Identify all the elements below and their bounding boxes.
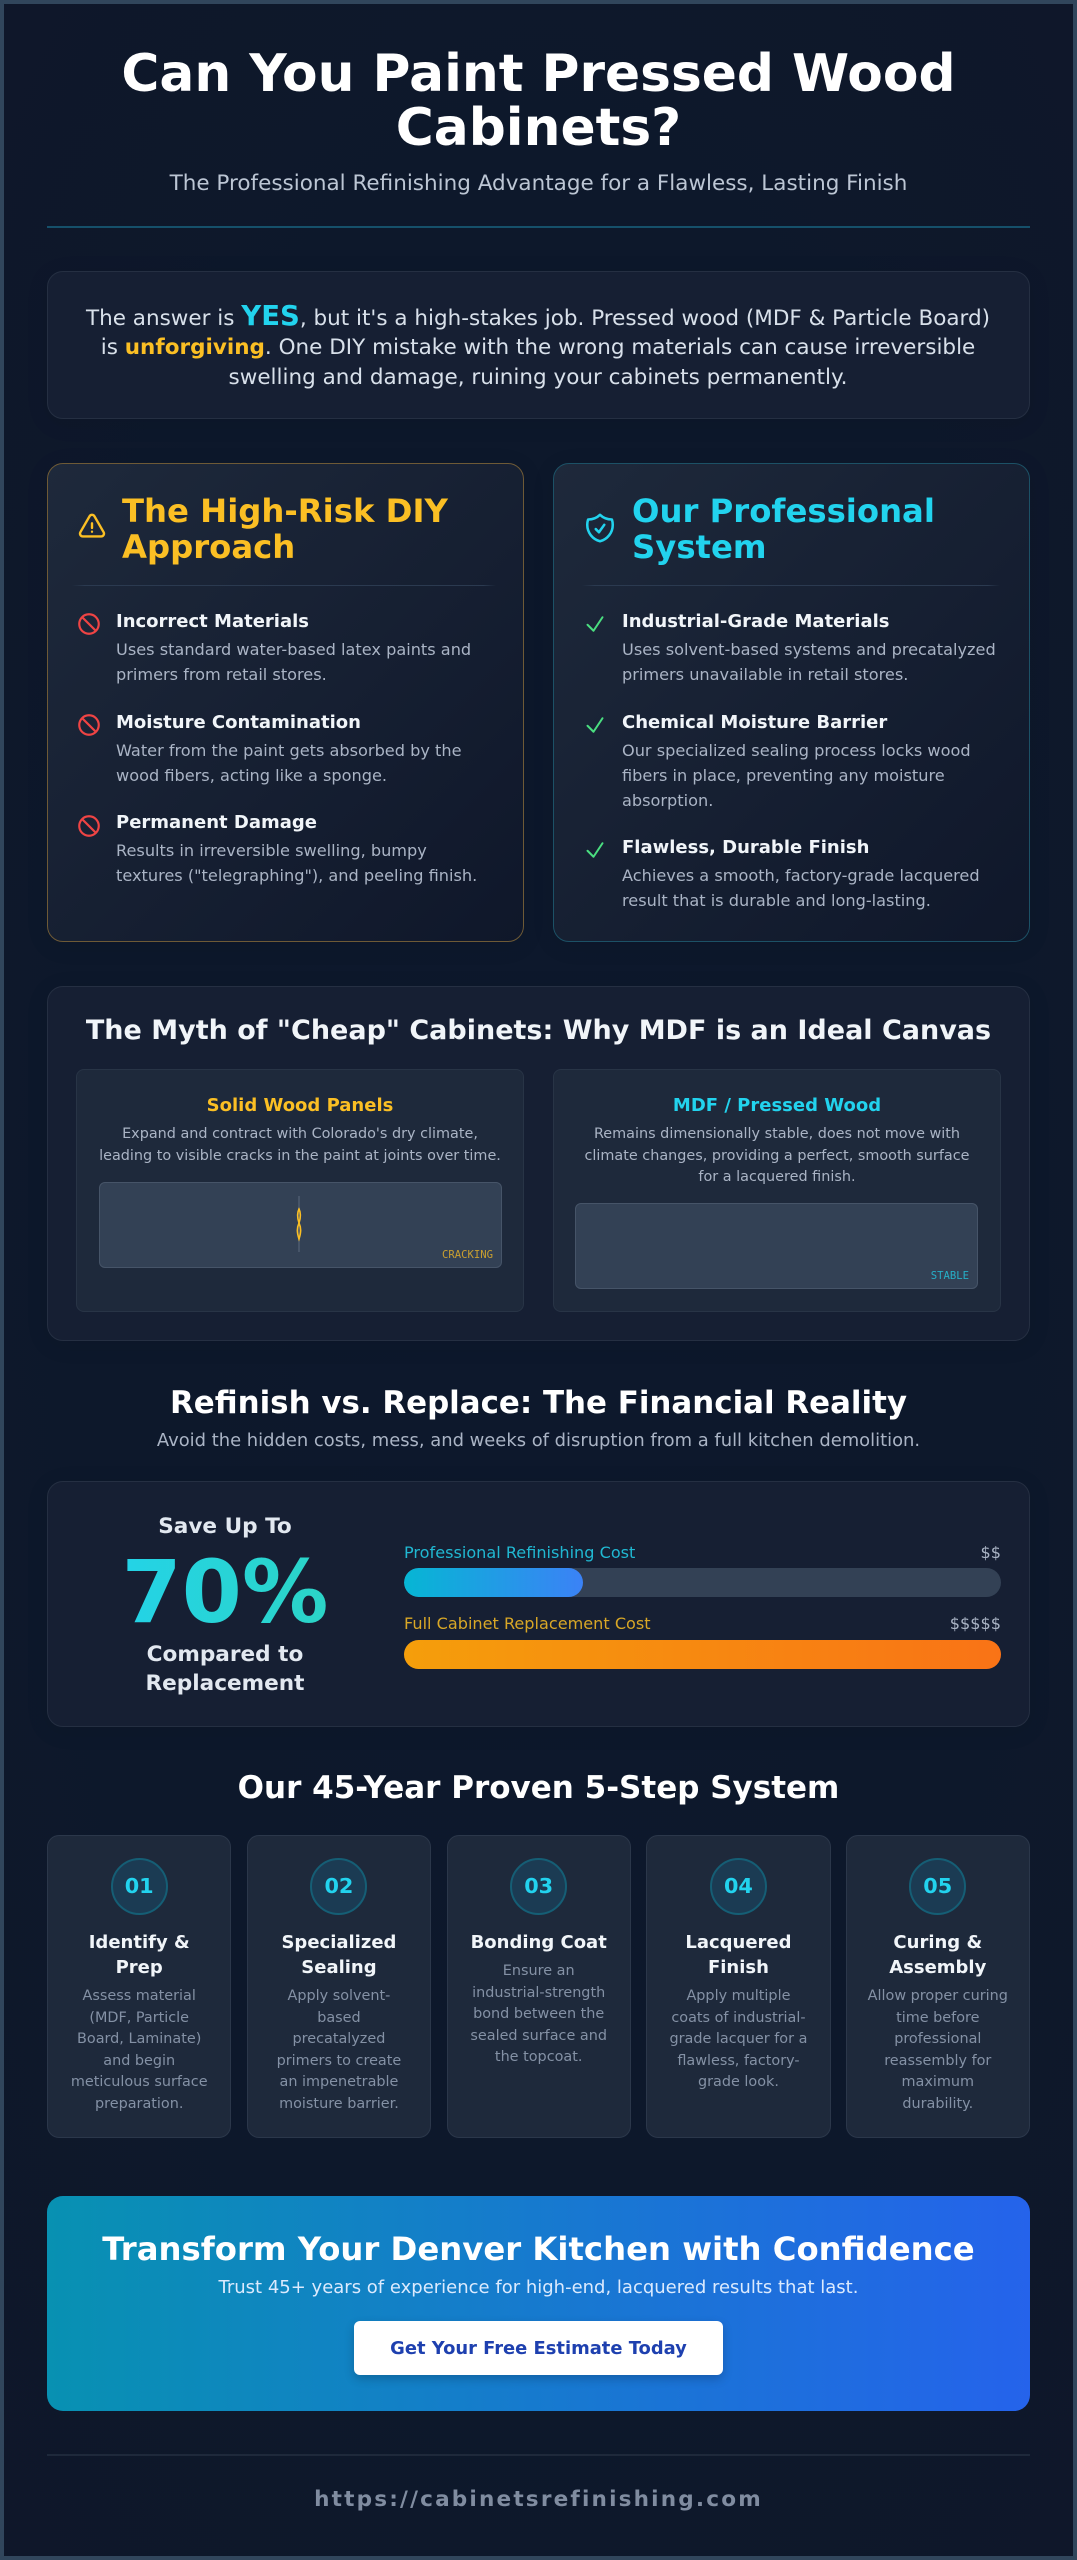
answer text (86, 300, 990, 390)
item: flawless durable finish: Achieves a smooth, factory-grade lacquered (622, 866, 980, 885)
step number (909, 1858, 966, 1915)
heading: myth: The Myth of "Cheap" Cabinets: Why MDF is an Ideal Canvas (86, 1015, 991, 1046)
item: chemical moisture barrier: absorption. (622, 791, 713, 810)
bar: refinishing (404, 1568, 1001, 1597)
save up to: Save Up To (158, 1514, 292, 1539)
step text: and begin (103, 2052, 175, 2068)
MDF sample (575, 1203, 978, 1289)
step title (685, 1932, 792, 1978)
compared to replacement (146, 1642, 304, 1696)
icon: check 1 (586, 616, 604, 632)
item: industrial-grade materials: primers unavailable in retail stores. (622, 665, 908, 684)
title: Cabinets? (396, 98, 681, 158)
step text: grade lacquer for a (669, 2031, 807, 2047)
step text: reassembly for (884, 2052, 991, 2068)
answer text: The answer is YES, but it's a high-stakes job. Pressed wood (MDF & Particle Board) (86, 300, 990, 332)
item: moisture contamination (116, 712, 462, 785)
MDF text: Remains dimensionally stable, does not move with (594, 1126, 960, 1142)
item: flawless durable finish: result that is durable and long-lasting. (622, 891, 931, 910)
step text: meticulous surface (71, 2074, 208, 2090)
stable tag: STABLE (931, 1270, 969, 1282)
heading: high-risk DIY: The High-Risk DIY (122, 492, 448, 530)
step title: Assembly (889, 1957, 986, 1978)
item: permanent damage: textures ("telegraphing"), and peeling finish. (116, 866, 477, 885)
step text: Apply multiple (686, 1988, 790, 2004)
step title: Curing & (893, 1932, 982, 1953)
heading: professional system: Our Professional (632, 492, 935, 530)
bar: replacement (404, 1640, 1001, 1669)
cracking tag: CRACKING (442, 1249, 493, 1261)
step text (868, 1988, 1008, 2112)
item: chemical moisture barrier: fibers in place, preventing any moisture (622, 766, 945, 785)
step number: 01 (125, 1874, 154, 1898)
bar chart: costs (404, 1542, 1001, 1669)
step title: Prep (116, 1957, 163, 1978)
item: incorrect materials: Incorrect Materials (116, 611, 309, 632)
step text: primers to create (277, 2052, 401, 2068)
step title (889, 1932, 986, 1978)
solid wood text: Expand and contract with Colorado's dry climate, (122, 1126, 478, 1142)
solid wood text: leading to visible cracks in the paint at joints over time. (99, 1148, 501, 1164)
step text (470, 1963, 607, 2065)
step text: Apply solvent- (288, 1988, 390, 2004)
MDF text (584, 1126, 970, 1185)
step text: professional (894, 2031, 981, 2047)
panel: solid wood (76, 1069, 524, 1312)
panel: professional system (553, 463, 1030, 942)
label: refinishing: Professional Refinishing Cost (404, 1542, 635, 1562)
item: incorrect materials (116, 611, 471, 684)
CTA button: Get Your Free Estimate Today (390, 2338, 687, 2359)
step number (310, 1858, 367, 1915)
step 1 card (47, 1835, 231, 2138)
step title: Sealing (301, 1957, 377, 1978)
step title (281, 1932, 396, 1978)
item: incorrect materials: primers from retail stores. (116, 665, 327, 684)
step text: moisture barrier. (279, 2096, 399, 2112)
step text: sealed surface and (470, 2028, 607, 2044)
item: permanent damage: Results in irreversible swelling, bumpy (116, 841, 427, 860)
CTA text: Trust 45+ years of experience for high-end, lacquered results that last. (219, 2277, 858, 2298)
step text (669, 1988, 807, 2090)
step text: (MDF, Particle (89, 2010, 189, 2026)
heading: professional system: System (632, 528, 767, 566)
icon: shield check (586, 514, 614, 542)
panel: savings (47, 1481, 1030, 1727)
step text: the topcoat. (495, 2049, 582, 2065)
answer text: swelling and damage, ruining your cabinets permanently. (229, 365, 847, 390)
step text (71, 1988, 208, 2112)
item: permanent damage (116, 812, 477, 885)
value: replacement: $$$$$ (950, 1614, 1001, 1633)
icon: ban 1 (78, 613, 100, 635)
panel: call to action (47, 2196, 1030, 2411)
step text: Allow proper curing (868, 1988, 1008, 2004)
step text: coats of industrial- (671, 2010, 806, 2026)
step text: flawless, factory- (677, 2052, 800, 2068)
crack line (296, 1196, 302, 1252)
item: moisture contamination: wood fibers, acting like a sponge. (116, 766, 387, 785)
item: chemical moisture barrier: Our specialized sealing process locks wood (622, 741, 971, 760)
title (121, 44, 956, 158)
step 5 card (846, 1835, 1030, 2138)
item: chemical moisture barrier (622, 712, 971, 810)
step number: 04 (724, 1874, 753, 1898)
panel: high-risk DIY approach (47, 463, 524, 942)
heading: high-risk DIY (122, 492, 448, 566)
step 3 card (446, 1835, 631, 2138)
step text: durability. (902, 2096, 973, 2112)
step 4 card (646, 1835, 831, 2138)
item: moisture contamination: Water from the paint gets absorbed by the (116, 741, 462, 760)
step title: Bonding Coat (471, 1932, 607, 1953)
icon: check 3 (586, 842, 604, 858)
step text: Assess material (83, 1988, 196, 2004)
item: industrial-grade materials: Uses solvent-based systems and precatalyzed (622, 640, 996, 659)
70 percent (76, 1542, 374, 1642)
step text: Ensure an (503, 1963, 575, 1979)
step number: 05 (923, 1874, 952, 1898)
compared to replacement: Replacement (146, 1671, 304, 1696)
item: chemical moisture barrier: Chemical Moisture Barrier (622, 712, 887, 733)
70 percent: 70% (122, 1542, 328, 1642)
icon: warning triangle (78, 514, 106, 538)
value: refinishing: $$ (981, 1542, 1001, 1562)
item: flawless durable finish (622, 837, 980, 910)
step number (510, 1858, 567, 1915)
MDF text: for a lacquered finish. (698, 1169, 856, 1185)
heading: five step system: Our 45-Year Proven 5-Step System (238, 1770, 839, 1806)
panel: MDF (553, 1069, 1001, 1312)
step text: maximum (902, 2074, 974, 2090)
step number (111, 1858, 168, 1915)
step text: Board, Laminate) (77, 2031, 201, 2047)
wood sample with crack (99, 1182, 502, 1268)
step title: Specialized (281, 1932, 396, 1953)
step 2 card (247, 1835, 431, 2138)
CTA button (354, 2321, 723, 2375)
solid wood text (99, 1126, 501, 1164)
step text: preparation. (95, 2096, 183, 2112)
CTA heading: Transform Your Denver Kitchen with Confidence (102, 2230, 975, 2268)
subheading: refinish vs replace: Avoid the hidden costs, mess, and weeks of disruption from a full kitchen demolition. (157, 1430, 920, 1451)
item: flawless durable finish: Flawless, Durable Finish (622, 837, 869, 858)
step text (277, 1988, 401, 2112)
heading: professional system (632, 492, 935, 566)
heading: refinish vs replace: Refinish vs. Replace: The Financial Reality (170, 1385, 907, 1421)
step text: grade look. (698, 2074, 779, 2090)
item: industrial-grade materials: Industrial-Grade Materials (622, 611, 889, 632)
heading: high-risk DIY: Approach (122, 528, 295, 566)
item: incorrect materials: Uses standard water-based latex paints and (116, 640, 471, 659)
icon: ban 2 (78, 714, 100, 736)
step number (710, 1858, 767, 1915)
solid wood title: Solid Wood Panels (207, 1095, 393, 1116)
title: Can You Paint Pressed Wood (121, 44, 956, 104)
step title: Lacquered (685, 1932, 792, 1953)
step text: bond between the (473, 2006, 604, 2022)
subtitle: The Professional Refinishing Advantage for a Flawless, Lasting Finish (170, 171, 907, 196)
step text: precatalyzed (293, 2031, 385, 2047)
step text: time before (896, 2010, 979, 2026)
panel: answer callout (47, 271, 1030, 419)
footer url: https://cabinetsrefinishing.com (314, 2487, 763, 2512)
step text: based (317, 2010, 361, 2026)
compared to replacement: Compared to (147, 1642, 303, 1667)
item: permanent damage: Permanent Damage (116, 812, 317, 833)
savings stat (122, 1514, 328, 1696)
MDF title: MDF / Pressed Wood (673, 1095, 881, 1116)
step number: 02 (324, 1874, 353, 1898)
step title: Identify & (89, 1932, 190, 1953)
item: moisture contamination: Moisture Contamination (116, 712, 361, 733)
step number: 03 (524, 1874, 553, 1898)
step text: an impenetrable (280, 2074, 398, 2090)
step text: industrial-strength (472, 1984, 605, 2000)
MDF text: climate changes, providing a perfect, smooth surface (584, 1148, 970, 1164)
icon: check 2 (586, 717, 604, 733)
icon: ban 3 (78, 815, 100, 837)
item: industrial-grade materials (622, 611, 996, 684)
step title: Finish (708, 1957, 769, 1978)
label: replacement: Full Cabinet Replacement Cost (404, 1614, 651, 1633)
answer text: is unforgiving. One DIY mistake with the wrong materials can cause irreversible (101, 335, 975, 360)
panel: myth of cheap cabinets (47, 986, 1030, 1341)
step title (89, 1932, 190, 1978)
